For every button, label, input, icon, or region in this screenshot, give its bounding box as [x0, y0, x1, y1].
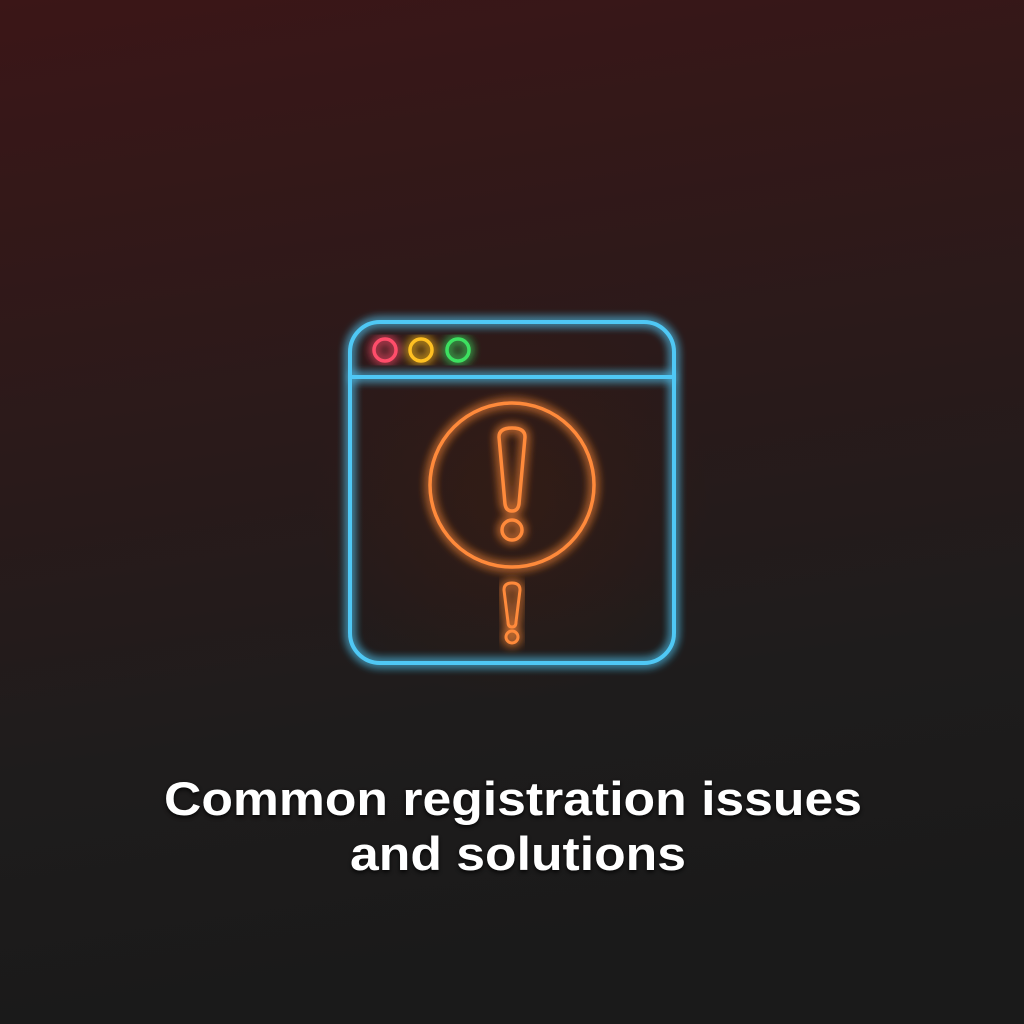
title: and solutions	[350, 827, 686, 880]
title: and solutions	[350, 829, 686, 882]
icon: browser window	[350, 322, 674, 663]
icon: small exclamation	[504, 583, 520, 643]
icon: warning circle with exclamation	[430, 403, 594, 567]
title	[164, 772, 862, 882]
window control dots	[374, 339, 469, 361]
title: Common registration issues	[164, 772, 862, 825]
title: Common registration issues	[164, 774, 862, 827]
window frame	[350, 322, 674, 663]
